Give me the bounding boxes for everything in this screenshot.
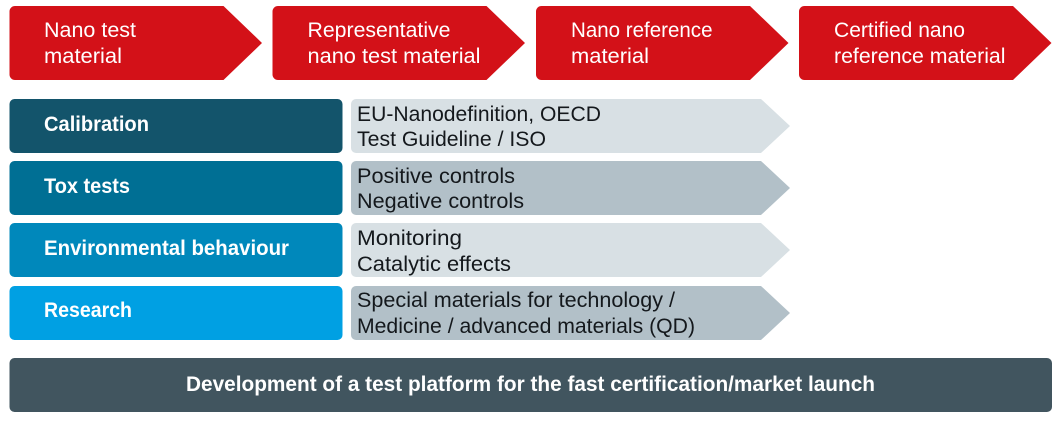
stage arrow: representative nano test material: nano test material — [308, 45, 480, 68]
row arrow: environmental applications: Catalytic effects — [357, 253, 511, 276]
row arrow: tox tests applications: Negative controls — [357, 190, 524, 213]
row arrow: calibration applications — [351, 99, 790, 153]
row label: research: Research — [44, 299, 132, 322]
row arrow: research applications: Medicine / advanced materials (QD) — [357, 315, 695, 338]
stage arrow: nano reference material: Nano reference — [571, 19, 712, 42]
stage arrow: representative nano test material — [272, 6, 525, 80]
bottom banner: test platform: Development of a test platform for the fast certification/market launch — [186, 373, 875, 396]
stage arrow: certified nano reference material — [799, 6, 1052, 80]
stage arrow: representative nano test material: Representative — [308, 19, 450, 42]
row arrow: calibration applications: Test Guideline / ISO — [357, 128, 546, 151]
stage arrow: certified nano reference material: Certified nano — [834, 19, 965, 42]
row arrow: research applications — [351, 286, 790, 340]
row label: environmental behaviour — [10, 223, 342, 277]
stage arrow: nano test material — [10, 6, 262, 80]
row arrow: tox tests applications: Positive controls — [357, 165, 515, 188]
stage arrow: nano test material: Nano test — [44, 19, 136, 42]
row arrow: environmental applications: Monitoring — [357, 227, 462, 250]
row arrow: environmental applications — [351, 223, 790, 277]
row label: calibration: Calibration — [44, 113, 149, 136]
row arrow: tox tests applications — [351, 161, 790, 215]
row label: environmental behaviour: Environmental behaviour — [44, 237, 289, 260]
row label: tox tests: Tox tests — [44, 175, 130, 198]
row label: calibration — [10, 99, 342, 153]
bottom banner: test platform — [10, 358, 1052, 412]
stage arrow: nano reference material: material — [571, 45, 649, 68]
row label: tox tests — [10, 161, 342, 215]
stage arrow: nano reference material — [536, 6, 788, 80]
row arrow: research applications: Special materials for technology / — [357, 289, 675, 312]
row arrow: calibration applications: EU-Nanodefinition, OECD — [357, 103, 601, 126]
stage arrow: nano test material: material — [44, 45, 122, 68]
row label: research — [10, 286, 342, 340]
stage arrow: certified nano reference material: reference material — [834, 45, 1006, 68]
